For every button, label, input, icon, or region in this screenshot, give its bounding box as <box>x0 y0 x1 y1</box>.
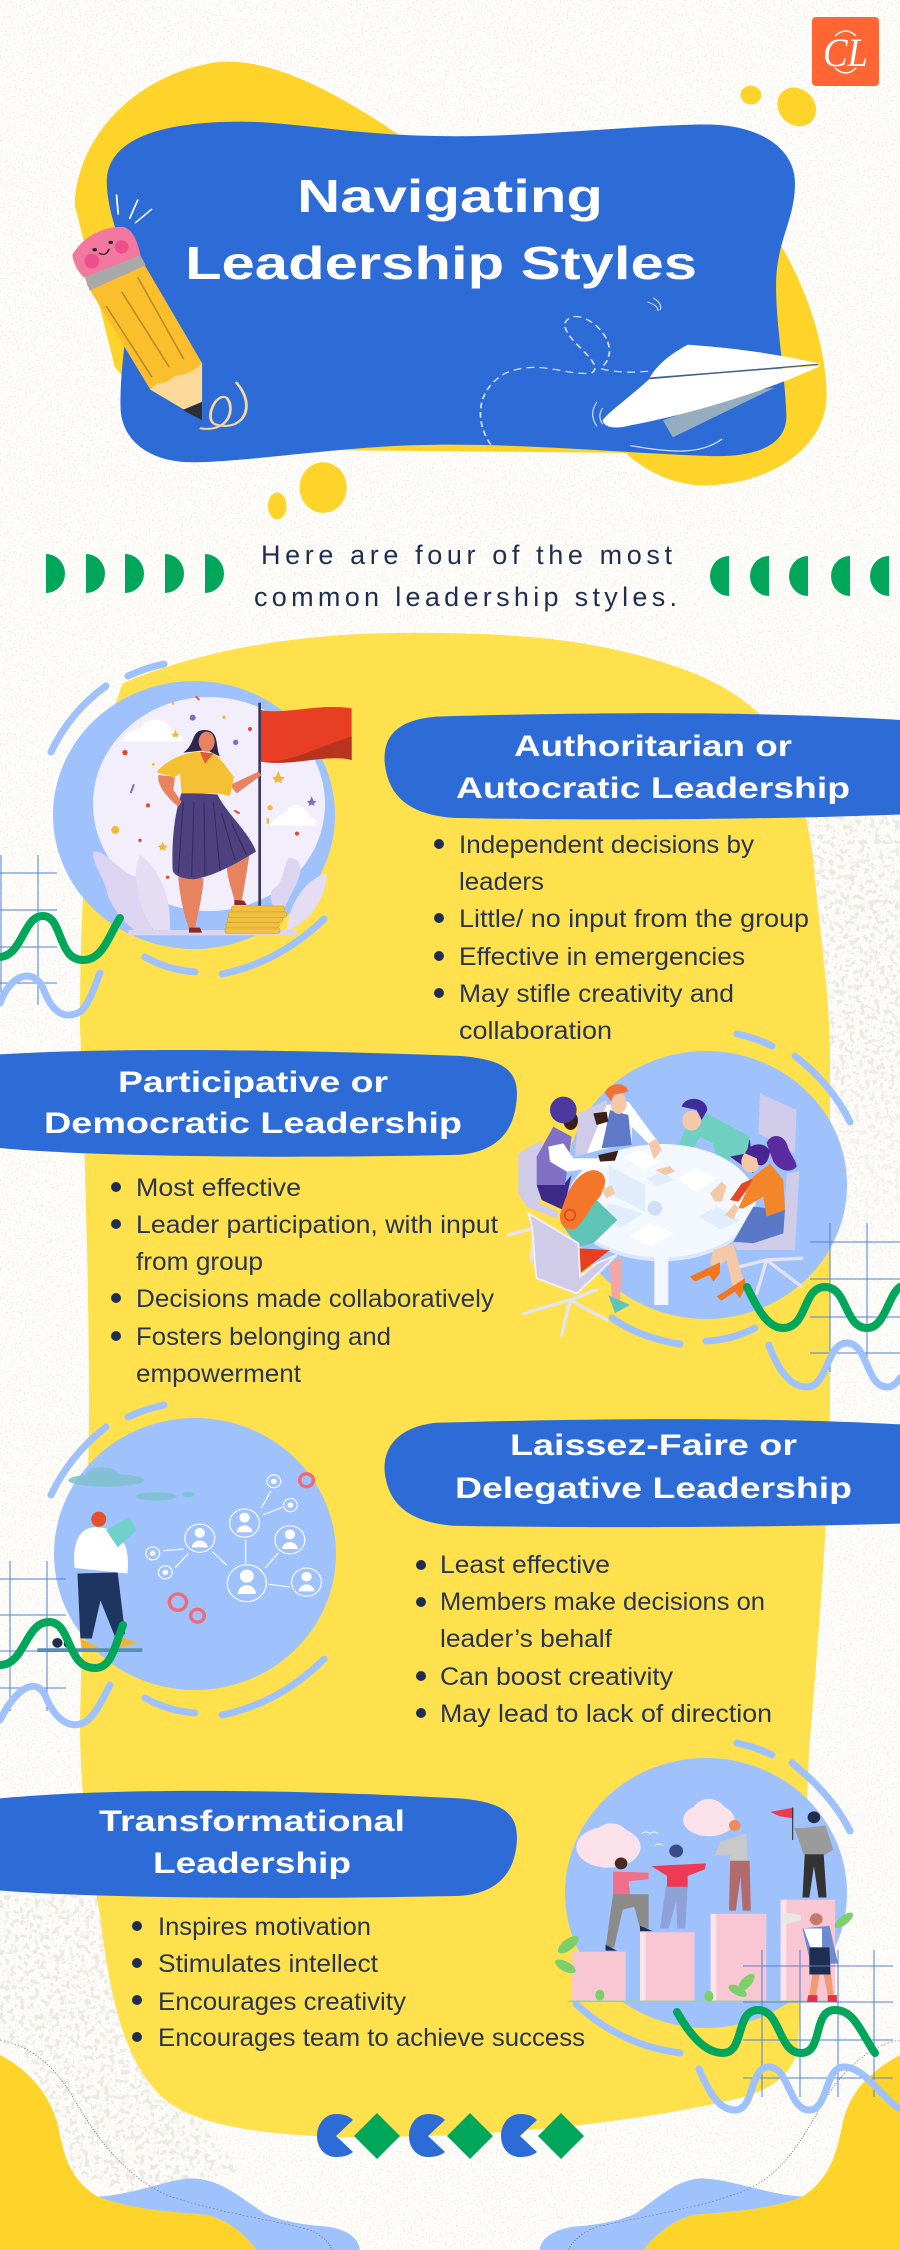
head <box>183 730 220 757</box>
logo: CL badge: CL <box>823 30 868 75</box>
figure <box>93 696 352 935</box>
circle and dashes <box>565 1034 850 1344</box>
text block: Laissez-Faire bullets: Can boost creativity <box>440 1663 674 1691</box>
section header: Transformational: Transformational <box>99 1805 405 1838</box>
text block: Transformational bullets: Inspires motivation <box>158 1913 371 1941</box>
section header: Laissez-Faire: Laissez-Faire or <box>510 1429 797 1462</box>
arms <box>230 772 262 793</box>
circle and dashes <box>51 1405 336 1715</box>
text block: Authoritarian bullets: Independent decisions by <box>459 831 755 859</box>
text block: Transformational bullets <box>132 1913 585 2052</box>
blouse <box>157 752 234 796</box>
bottom corner shapes <box>0 2040 900 2250</box>
section header: Authoritarian: Authoritarian or <box>514 730 792 763</box>
person left <box>537 1175 572 1210</box>
text block: Laissez-Faire bullets: Least effective <box>440 1551 610 1579</box>
section header: Transformational <box>0 1791 517 1898</box>
confetti <box>122 696 299 879</box>
clouds <box>123 720 317 826</box>
front chair <box>528 1213 617 1293</box>
woman middle <box>669 1844 683 1857</box>
person right <box>767 1136 797 1171</box>
figures <box>553 1799 856 2002</box>
man third <box>729 1820 740 1831</box>
bottom icons: pac shapes and diamonds <box>317 2113 584 2159</box>
header banner <box>75 62 827 486</box>
text block: Participative bullets: Leader participation, with input <box>136 1211 498 1239</box>
text block: Authoritarian bullets: Little/ no input from the group <box>459 905 809 933</box>
title: Navigating <box>297 170 603 222</box>
section header: Authoritarian: Autocratic Leadership <box>456 772 850 805</box>
circle and dashes <box>51 664 335 974</box>
illustration: woman with flag <box>51 664 352 974</box>
chairs <box>518 1093 799 1250</box>
text block: Authoritarian bullets: collaboration <box>459 1017 612 1045</box>
skirt <box>172 792 256 879</box>
intro text: common leadership styles. <box>254 582 677 612</box>
person back <box>587 1102 657 1153</box>
intro text <box>254 540 677 612</box>
legs right <box>710 1243 743 1290</box>
green half circles right <box>710 556 889 596</box>
left grid and waves 3 <box>0 1561 123 1725</box>
network and man <box>37 1467 321 1652</box>
section header: Laissez-Faire: Delegative Leadership <box>455 1472 852 1505</box>
coins <box>225 906 287 933</box>
text block: Authoritarian bullets: leaders <box>459 868 544 896</box>
section header: Transformational: Leadership <box>153 1847 351 1880</box>
text block: Transformational bullets: Encourages team to achieve success <box>158 2024 585 2052</box>
blue title blob <box>107 122 795 462</box>
text block: Laissez-Faire bullets: Members make decisions on <box>440 1588 765 1616</box>
illustration: climbing blocks <box>553 1743 856 2053</box>
text block: Laissez-Faire bullets: May lead to lack of direction <box>440 1700 772 1728</box>
text block: Participative bullets <box>111 1174 498 1388</box>
text block: Authoritarian bullets <box>434 831 809 1045</box>
man <box>77 1572 125 1638</box>
section header: Laissez-Faire <box>385 1419 900 1527</box>
left grid and waves 1 <box>0 855 120 1015</box>
title <box>185 170 697 289</box>
text block: Laissez-Faire bullets <box>416 1551 772 1728</box>
text block: Participative bullets: from group <box>136 1248 263 1276</box>
foliage <box>93 852 327 933</box>
green half circles left <box>46 554 224 593</box>
intro text: Here are four of the most <box>261 540 672 570</box>
person right back <box>713 1140 753 1173</box>
text block: Laissez-Faire bullets: leader’s behalf <box>440 1625 612 1653</box>
table <box>568 1147 756 1261</box>
icon: paper plane with dashed trail <box>480 298 821 451</box>
man with flag <box>808 1811 820 1823</box>
yellow dots top right <box>740 85 821 129</box>
title: Leadership Styles <box>185 237 697 289</box>
circle and dashes <box>565 1743 850 2053</box>
yellow blob behind banner <box>75 62 827 486</box>
grid and waves 4 <box>677 1950 898 2110</box>
woman with megaphone <box>810 1913 823 1925</box>
text block: Transformational bullets: Stimulates intellect <box>158 1950 378 1978</box>
flag <box>261 707 352 763</box>
text block: Participative bullets: Decisions made collaboratively <box>136 1285 495 1313</box>
right grid and waves 2 <box>747 1223 900 1387</box>
climber <box>615 1857 627 1869</box>
icon: pencil <box>72 195 246 429</box>
illustration: team around table <box>508 1034 850 1344</box>
text block: Transformational bullets: Encourages creativity <box>158 1988 407 2016</box>
text block: Authoritarian bullets: Effective in emergencies <box>459 943 745 971</box>
section header: Participative: Participative or <box>118 1066 388 1099</box>
text block: Participative bullets: empowerment <box>136 1360 301 1388</box>
section header: Participative <box>0 1050 517 1157</box>
person front <box>577 1248 610 1273</box>
text block: Participative bullets: Fosters belonging and <box>136 1323 391 1351</box>
table items <box>600 1149 740 1247</box>
panel: main yellow backdrop <box>80 633 830 2137</box>
figures <box>508 1084 802 1335</box>
text block: Participative bullets: Most effective <box>136 1174 301 1202</box>
section header: Participative: Democratic Leadership <box>44 1107 462 1140</box>
illustration: delegating man and network <box>37 1405 336 1715</box>
section header: Authoritarian <box>385 713 900 819</box>
legs <box>178 877 203 928</box>
yellow dots below banner <box>268 462 347 519</box>
text block: Authoritarian bullets: May stifle creativity and <box>459 980 734 1008</box>
hands and sleeves <box>548 1143 608 1172</box>
logo: CL badge <box>812 17 879 86</box>
